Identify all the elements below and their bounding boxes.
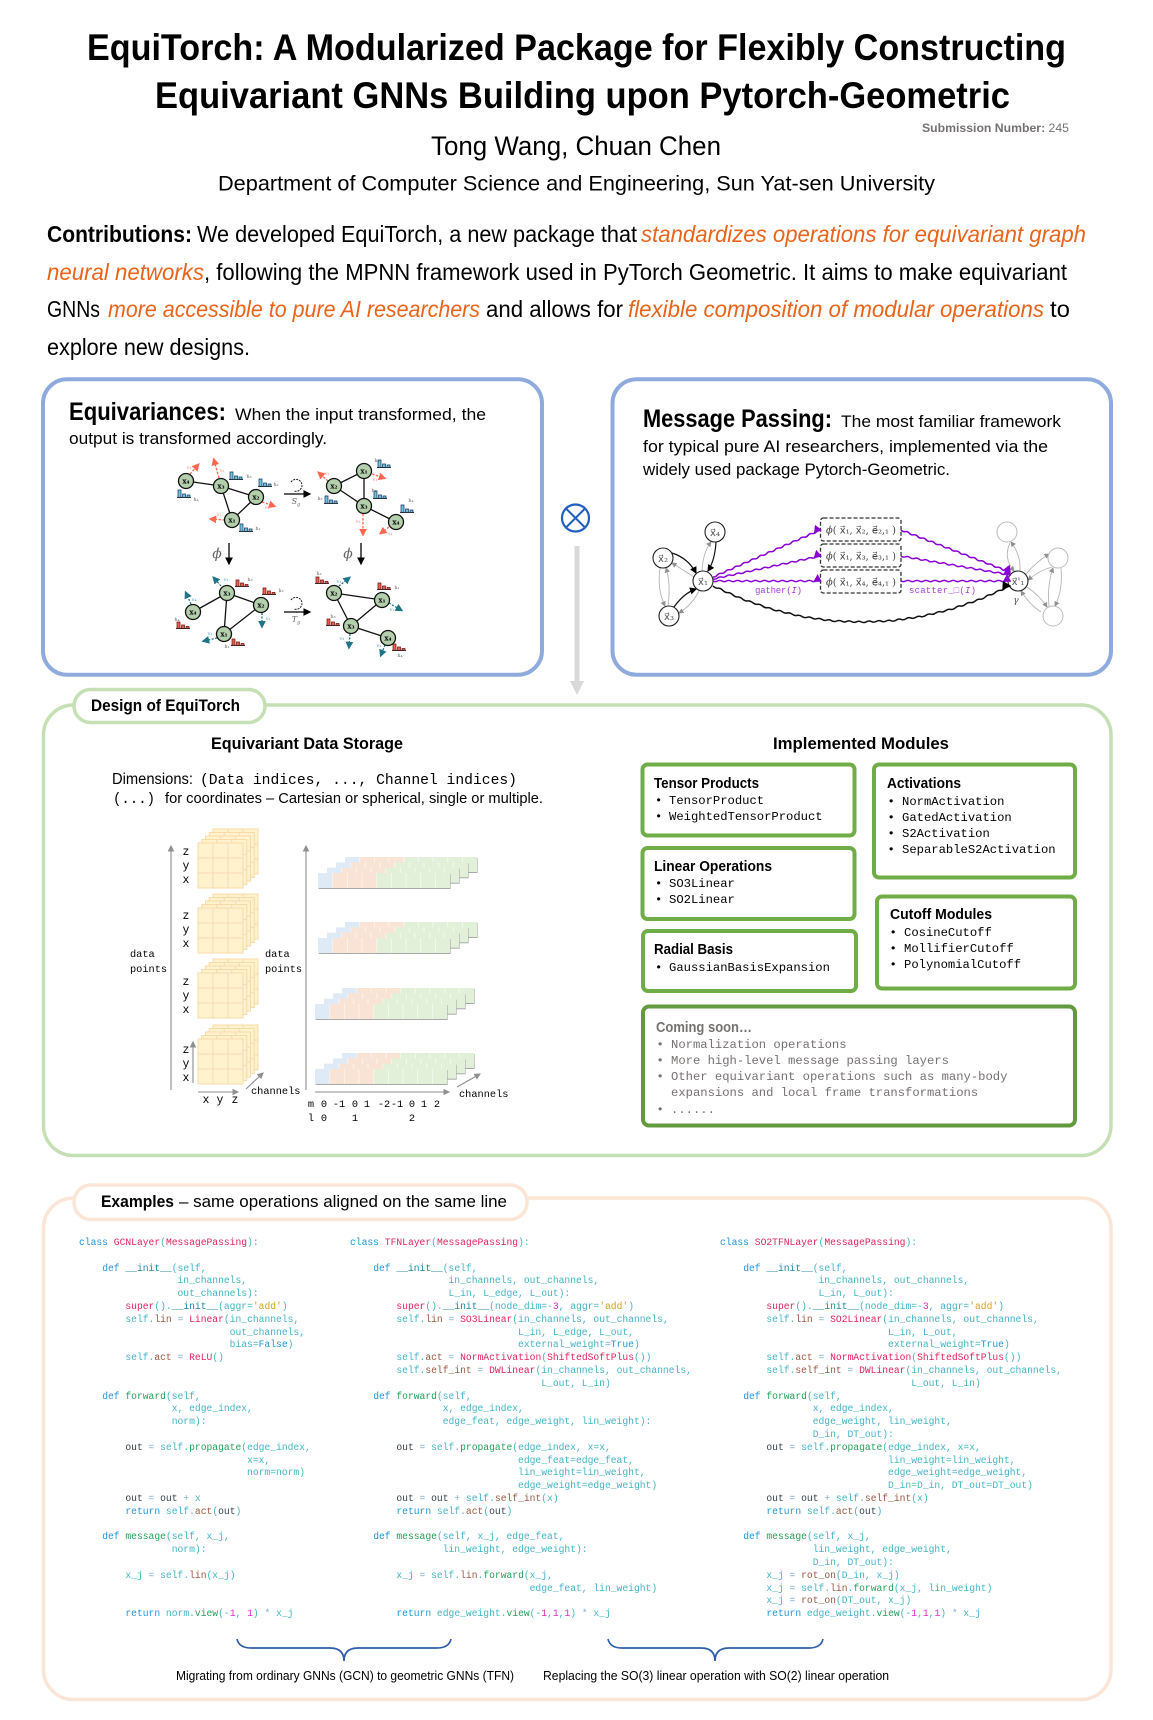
chart: channel stacks: 1 xyxy=(421,1099,427,1111)
diagram: equivariant graph transformations: x₁ xyxy=(360,466,368,476)
module: activations: NormActivation xyxy=(902,795,1004,809)
module: cutoff modules: PolynomialCutoff xyxy=(904,958,1021,972)
contributions paragraph: and allows for xyxy=(486,296,623,322)
chart: channel stacks: -1 xyxy=(333,1099,345,1111)
diagram: equivariant graph transformations: h₁ xyxy=(394,585,400,591)
diagram: equivariant graph transformations: h₃ xyxy=(330,614,336,620)
diagram: message passing graph: ϕ( x⃗₁, x⃗₃, e⃗₃,₁ ) xyxy=(826,550,896,562)
diagram: equivariant graph transformations: g xyxy=(297,502,300,508)
chart: coordinate stacks: x xyxy=(203,1094,210,1107)
module: tensor products: Tensor Products xyxy=(654,776,759,792)
chart: coordinate stacks: z xyxy=(183,976,189,989)
contributions paragraph: , following the MPNN framework used in PyTorch Geometric. It aims to make equivariant xyxy=(204,259,1068,285)
diagram: message passing graph: x⃗₁ xyxy=(698,577,708,588)
module: coming soon: expansions and local frame transformations xyxy=(671,1086,978,1100)
chart: coordinate stacks: z xyxy=(183,1044,189,1057)
contributions paragraph: explore new designs. xyxy=(47,334,250,360)
chart: coordinate stacks: points xyxy=(130,964,167,976)
diagram: equivariant graph transformations: x₄ xyxy=(182,476,190,486)
contributions paragraph: to xyxy=(1050,296,1070,322)
module: tensor products: • xyxy=(655,794,662,808)
module: radial basis: Radial Basis xyxy=(654,942,733,958)
diagram: message passing graph: x⃗₂ xyxy=(658,554,668,565)
submission number: Submission Number: 245 xyxy=(922,121,1069,135)
chart: channel stacks: 1 xyxy=(352,1113,358,1125)
module: tensor products: • xyxy=(655,810,662,824)
module: activations: • xyxy=(888,795,895,809)
chart: coordinate stacks: y xyxy=(183,990,190,1003)
diagram: equivariant graph transformations: h₃ xyxy=(246,474,252,480)
affiliation: Department of Computer Science and Engineering, Sun Yat-sen University xyxy=(218,172,935,196)
chart: channel stacks: 0 xyxy=(352,1099,358,1111)
chart: channel stacks: channels xyxy=(459,1089,508,1101)
module: linear operations: SO2Linear xyxy=(669,893,735,907)
diagram: equivariant graph transformations: h₄ xyxy=(174,617,180,623)
diagram: equivariant graph transformations: v₂ xyxy=(265,616,270,622)
diagram: equivariant graph transformations: x₄ xyxy=(392,518,400,526)
diagram: equivariant graph transformations: v₁ xyxy=(207,631,212,637)
chart: channel stacks: 1 xyxy=(364,1099,370,1111)
diagram: equivariant graph transformations: x₃ xyxy=(347,622,355,630)
module: activations: • xyxy=(888,811,895,825)
module: coming soon: ...... xyxy=(671,1103,715,1117)
diagram: equivariant graph transformations: v₃ xyxy=(219,468,224,474)
module: cutoff modules: MollifierCutoff xyxy=(904,942,1014,956)
diagram: equivariant graph transformations: h₃ xyxy=(247,577,253,583)
diagram: equivariant graph transformations: x₄ xyxy=(384,634,392,642)
heading: message passing: Message Passing: xyxy=(643,405,832,433)
contributions paragraph: We developed EquiTorch, a new package that xyxy=(197,221,638,247)
module: coming soon: • xyxy=(656,1038,664,1052)
chart: coordinate stacks: y xyxy=(183,860,190,873)
tab: design of equitorch: Design of EquiTorch xyxy=(91,697,240,715)
chart: channel stacks: m xyxy=(308,1099,314,1111)
chart: coordinate stacks: x xyxy=(183,874,190,887)
diagram: message passing graph: x⃗₃ xyxy=(664,612,674,623)
diagram: equivariant graph transformations: v₁ xyxy=(372,477,377,483)
diagram: equivariant graph transformations: x₃ xyxy=(217,482,225,490)
chart: coordinate stacks: z xyxy=(183,910,189,923)
diagram: message passing graph: gather(I) xyxy=(755,586,802,596)
diagram: equivariant graph transformations: x₂ xyxy=(257,600,265,610)
module: cutoff modules xyxy=(877,896,1075,988)
diagram: equivariant graph transformations: x₃ xyxy=(223,588,231,598)
panel: equivariances xyxy=(43,379,542,675)
module: coming soon: Coming soon… xyxy=(656,1020,752,1036)
module: activations: S2Activation xyxy=(902,827,990,841)
module: tensor products xyxy=(642,764,854,836)
diagram: equivariant graph transformations: v₁ xyxy=(389,607,394,613)
panel: design of equitorch xyxy=(44,690,1111,1156)
chart: channel stacks: -2 xyxy=(378,1099,390,1111)
module: coming soon xyxy=(643,1006,1075,1126)
diagram: equivariant graph transformations: h₂ xyxy=(317,496,323,502)
heading: equivariances: Equivariances: xyxy=(69,398,226,426)
diagram: equivariant graph transformations: h₄ xyxy=(397,653,403,659)
diagram: equivariant graph transformations: v₂ xyxy=(336,579,341,585)
diagram: equivariant graph transformations: ϕ xyxy=(212,546,222,562)
panel: message passing xyxy=(612,379,1111,675)
chart: channel stacks: l xyxy=(308,1113,314,1125)
diagram: equivariant graph transformations: h₁ xyxy=(374,458,380,464)
diagram: message passing graph: x⃗'₁ xyxy=(1012,577,1024,588)
module: cutoff modules: CosineCutoff xyxy=(904,926,992,940)
contributions paragraph xyxy=(47,221,1086,360)
chart: coordinate stacks: y xyxy=(183,924,190,937)
text: dimensions: (...) xyxy=(113,792,155,808)
module: activations: GatedActivation xyxy=(902,811,1012,825)
module: radial basis: GaussianBasisExpansion xyxy=(669,961,830,975)
text: message passing description: The most familiar framework xyxy=(841,412,1062,431)
text: dimensions: for coordinates – Cartesian or spherical, single or multiple. xyxy=(165,790,543,807)
chart: channel stacks: points xyxy=(265,964,302,976)
brace: gcn to tfn xyxy=(237,1639,451,1661)
module: coming soon: • xyxy=(656,1103,664,1117)
module: linear operations: SO3Linear xyxy=(669,877,735,891)
diagram: equivariant graph transformations: g xyxy=(297,620,300,626)
tab: examples: Examples xyxy=(101,1193,174,1211)
diagram: equivariant graph transformations: x₁ xyxy=(228,516,236,524)
heading: equivariant data storage: Equivariant Data Storage xyxy=(211,735,403,753)
diagram: equivariant graph transformations: h₁ xyxy=(255,526,261,532)
title xyxy=(87,27,1066,116)
diagram: equivariant graph transformations: v₂ xyxy=(324,471,329,477)
chart: coordinate stacks: z xyxy=(183,846,189,859)
module: linear operations: Linear Operations xyxy=(654,859,772,875)
module: tensor products: TensorProduct xyxy=(669,794,764,808)
module: cutoff modules: Cutoff Modules xyxy=(890,907,992,923)
brace: so3 to so2 xyxy=(608,1639,823,1661)
diagram: equivariant graph transformations: x₃ xyxy=(360,502,368,510)
diagram: equivariant graph transformations: h₃ xyxy=(371,488,377,494)
contributions paragraph: more accessible to pure AI researchers xyxy=(108,296,480,322)
code: SO2TFNLayer: class SO2TFNLayer(MessagePassing): def __init__(self, in_channels, out_channels, L_in, L_out): super().__init__(node_dim=-3, aggr='add') self.lin = SO2Linear(in_channels, out_channels, L_in, L_out, external_weight=True) self.act = NormActivation(ShiftedSoftPlus()) self.self_int = DWLinear(in_channels, out_channels, L_out, L_in) def forward(self, x, edge_index, edge_weight, lin_weight, D_in, DT_out): out = self.propagate(edge_index, x=x, lin_weight=lin_weight, edge_weight=edge_weight, D_in=D_in, DT_out=DT_out) out = out + self.self_int(x) return self.act(out) def message(self, x_j, lin_weight, edge_weight, D_in, DT_out): x_j = rot_on(D_in, x_j) x_j = self.lin.forward(x_j, lin_weight) x_j = rot_on(DT_out, x_j) return edge_weight.view(-1,1,1) * x_j xyxy=(720,1237,1062,1619)
chart: channel stacks: -1 xyxy=(391,1099,403,1111)
caption: gcn to tfn: Migrating from ordinary GNNs (GCN) to geometric GNNs (TFN) xyxy=(176,1668,514,1683)
module: cutoff modules: • xyxy=(890,958,897,972)
module: activations: • xyxy=(888,843,895,857)
diagram: equivariant graph transformations: h₁ xyxy=(224,644,230,650)
text: message passing description: widely used package Pytorch-Geometric. xyxy=(642,460,950,479)
module: activations: • xyxy=(888,827,895,841)
arrow: down to design xyxy=(570,546,584,695)
chart: channel stacks: 2 xyxy=(409,1113,415,1125)
diagram: equivariant graph transformations: x₄ xyxy=(189,608,197,616)
chart: coordinate stacks: z xyxy=(232,1094,238,1107)
diagram: equivariant graph transformations: T xyxy=(292,615,297,624)
text: dimensions: (Data indices, ..., Channel indices) xyxy=(200,773,517,789)
diagram: message passing graph: γ xyxy=(1013,596,1019,606)
diagram: message passing graph: ϕ( x⃗₁, x⃗₄, e⃗₄,₁ ) xyxy=(826,576,896,588)
text: message passing description xyxy=(642,412,1062,479)
chart: coordinate stacks: y xyxy=(217,1094,224,1107)
diagram: equivariant graph transformations: h₄ xyxy=(193,497,199,503)
chart: channel stacks: 0 xyxy=(321,1113,327,1125)
chart: channel stacks xyxy=(265,846,508,1125)
chart: channel stacks: 2 xyxy=(434,1099,440,1111)
diagram: equivariant graph transformations: v₃ xyxy=(355,519,360,525)
module: coming soon: Other equivariant operations such as many-body xyxy=(671,1070,1007,1084)
diagram: equivariant graph transformations: S xyxy=(292,497,297,506)
caption: so3 to so2: Replacing the SO(3) linear operation with SO(2) linear operation xyxy=(543,1668,889,1683)
text: equivariances description: output is transformed accordingly. xyxy=(69,429,327,448)
title: EquiTorch: A Modularized Package for Flexibly Constructing xyxy=(87,27,1066,68)
module: coming soon: More high-level message passing layers xyxy=(671,1054,949,1068)
module: activations: SeparableS2Activation xyxy=(902,843,1056,857)
module: linear operations: • xyxy=(655,877,662,891)
module: radial basis xyxy=(643,931,856,991)
diagram: message passing graph xyxy=(653,518,1068,626)
diagram: equivariant graph transformations: v₄ xyxy=(191,597,196,603)
chart: coordinate stacks: y xyxy=(183,1058,190,1071)
text: equivariances description: When the input transformed, the xyxy=(235,405,486,424)
chart: coordinate stacks: x xyxy=(183,938,190,951)
chart: coordinate stacks: x xyxy=(183,1004,190,1017)
diagram: message passing graph: scatter_□(I) xyxy=(909,586,976,596)
code: TFNLayer: class TFNLayer(MessagePassing): def __init__(self, in_channels, out_channels, L_in, L_edge, L_out): super().__init__(node_dim=-3, aggr='add') self.lin = SO3Linear(in_channels, out_channels, L_in, L_edge, L_out, external_weight=True) self.act = NormActivation(ShiftedSoftPlus()) self.self_int = DWLinear(in_channels, out_channels, L_out, L_in) def forward(self, x, edge_index, edge_feat, edge_weight, lin_weight): out = self.propagate(edge_index, x=x, edge_feat=edge_feat, lin_weight=lin_weight, edge_weight=edge_weight) out = out + self.self_int(x) return self.act(out) def message(self, x_j, edge_feat, lin_weight, edge_weight): x_j = self.lin.forward(x_j, edge_feat, lin_weight) return edge_weight.view(-1,1,1) * x_j xyxy=(350,1237,692,1619)
tab: examples xyxy=(74,1185,527,1220)
chart: channel stacks: data xyxy=(265,949,290,961)
panel: examples xyxy=(44,1185,1111,1700)
code: GCNLayer: class GCNLayer(MessagePassing): def __init__(self, in_channels, out_channels): super().__init__(aggr='add') self.lin = Linear(in_channels, out_channels, bias=False) self.act = ReLU() def forward(self, x, edge_index, norm): out = self.propagate(edge_index, x=x, norm=norm) out = out + x return self.act(out) def message(self, x_j, norm): x_j = self.lin(x_j) return norm.view(-1, 1) * x_j xyxy=(79,1237,311,1619)
module: coming soon: • xyxy=(656,1054,664,1068)
diagram: equivariant graph transformations: v₃ xyxy=(223,577,228,583)
diagram: message passing graph: ϕ( x⃗₁, x⃗₂, e⃗₂,₁ ) xyxy=(826,524,896,536)
diagram: equivariant graph transformations xyxy=(174,458,414,659)
diagram: message passing graph: x⃗₄ xyxy=(710,528,720,539)
chart: channel stacks: 0 xyxy=(321,1099,327,1111)
text: dimensions: Dimensions: xyxy=(112,771,193,788)
tab: examples: – same operations aligned on the same line xyxy=(179,1193,507,1211)
diagram: equivariant graph transformations: h₂ xyxy=(316,571,322,577)
chart: coordinate stacks: x xyxy=(183,1072,190,1085)
contributions paragraph: Contributions: xyxy=(47,221,192,247)
contributions paragraph: standardizes operations for equivariant graph xyxy=(641,221,1086,247)
chart: coordinate stacks: data xyxy=(130,949,155,961)
diagram: equivariant graph transformations: h₂ xyxy=(278,588,284,594)
contributions paragraph: GNNs xyxy=(47,296,100,322)
text: dimensions xyxy=(112,771,543,808)
module: radial basis: • xyxy=(655,961,662,975)
heading: implemented modules: Implemented Modules xyxy=(773,735,949,753)
icon: tensor product operator xyxy=(562,504,589,532)
diagram: equivariant graph transformations: x₁ xyxy=(378,596,386,604)
diagram: equivariant graph transformations: v₁ xyxy=(216,512,221,518)
module: activations: Activations xyxy=(887,776,961,792)
chart: coordinate stacks xyxy=(130,829,300,1107)
module: activations xyxy=(874,764,1075,878)
diagram: equivariant graph transformations: v₂ xyxy=(264,505,269,511)
chart: coordinate stacks: channels xyxy=(251,1086,300,1098)
tab: design of equitorch xyxy=(74,690,265,722)
contributions paragraph: flexible composition of modular operations xyxy=(628,296,1044,322)
module: cutoff modules: • xyxy=(890,942,897,956)
contributions paragraph: neural networks xyxy=(47,259,204,285)
diagram: equivariant graph transformations: x₁ xyxy=(220,630,228,638)
module: coming soon: • xyxy=(656,1070,664,1084)
module: tensor products: WeightedTensorProduct xyxy=(669,810,823,824)
diagram: equivariant graph transformations: v₄ xyxy=(376,643,381,649)
diagram: equivariant graph transformations: v₄ xyxy=(186,465,191,471)
diagram: equivariant graph transformations: h₄ xyxy=(408,498,414,504)
text: message passing description: for typical pure AI researchers, implemented via the xyxy=(643,437,1048,456)
diagram: equivariant graph transformations: x₂ xyxy=(330,588,338,598)
diagram: equivariant graph transformations: x₂ xyxy=(252,492,260,502)
diagram: equivariant graph transformations: v₃ xyxy=(339,636,344,642)
title: Equivariant GNNs Building upon Pytorch-Geometric xyxy=(155,75,1010,116)
chart: channel stacks: 0 xyxy=(409,1099,415,1111)
diagram: equivariant graph transformations: v₄ xyxy=(387,531,392,537)
diagram: equivariant graph transformations: h₂ xyxy=(273,482,279,488)
module: cutoff modules: • xyxy=(890,926,897,940)
diagram: equivariant graph transformations: x₂ xyxy=(330,482,338,490)
module: coming soon: Normalization operations xyxy=(671,1038,847,1052)
text: equivariances description xyxy=(69,405,486,448)
diagram: equivariant graph transformations: ϕ xyxy=(343,546,353,562)
module: linear operations xyxy=(642,848,854,919)
authors: Tong Wang, Chuan Chen xyxy=(431,131,721,161)
module: linear operations: • xyxy=(655,893,662,907)
